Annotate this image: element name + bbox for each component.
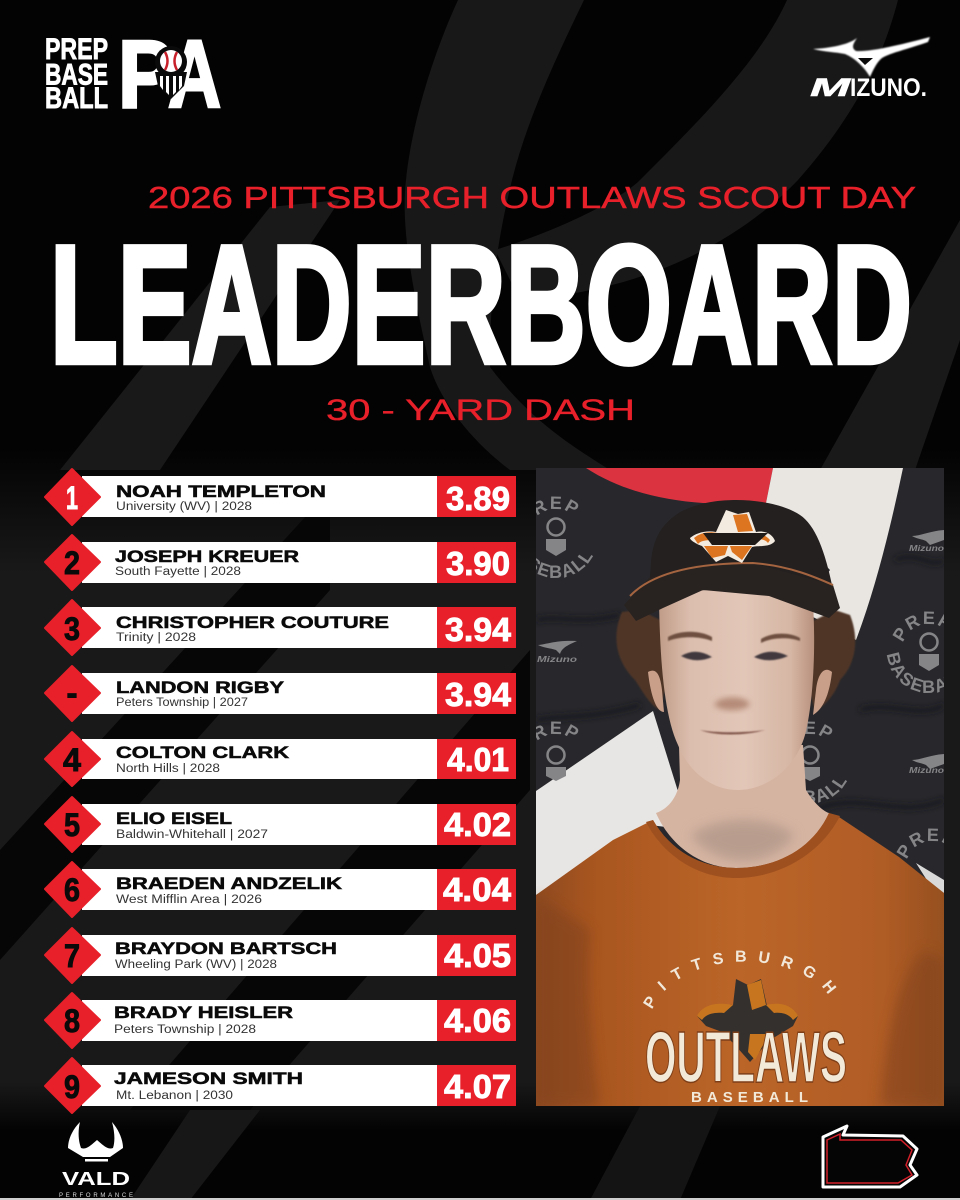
logo: VALD Performance: PERFORMANCE: [59, 1193, 133, 1199]
backdrop logos: PREP: [536, 496, 578, 515]
icon: baseball shield: [155, 46, 187, 99]
row 8: BRAYDON BARTSCH: [115, 939, 337, 958]
player: shirt: [536, 813, 944, 1106]
row 1: University (WV) | 2028: [116, 501, 252, 513]
row 3: CHRISTOPHER COUTURE: [116, 613, 389, 632]
row 1: 1: [66, 480, 78, 516]
backdrop logos: BASEBALL: [536, 554, 593, 578]
row 7: 6: [64, 872, 80, 908]
row 6: 4.02: [444, 806, 511, 843]
player: face: [659, 589, 814, 790]
logo: Prep Baseball PA: BALL: [45, 82, 108, 115]
row 6: Baldwin-Whitehall | 2027: [116, 829, 268, 841]
row 4: Peters Township | 2027: [116, 697, 248, 709]
backdrop logos: [536, 496, 944, 858]
row 5: [45, 732, 516, 786]
row 10: 9: [64, 1069, 80, 1105]
row 9: 4.06: [444, 1002, 511, 1039]
heading: event name: 2026 PITTSBURGH OUTLAWS SCOUT DAY: [148, 181, 916, 215]
player: neck: [656, 745, 829, 868]
row 4: LANDON RIGBY: [116, 678, 285, 697]
backdrop logos: BASEBALL: [806, 780, 847, 803]
shirt logo: BASEBALL: [691, 1089, 808, 1106]
row 9: [45, 993, 516, 1048]
row 2: [45, 535, 516, 590]
row 7: BRAEDEN ANDZELIK: [116, 874, 343, 893]
player: cap: [624, 500, 840, 621]
logo: Prep Baseball PA: A: [168, 21, 221, 128]
shirt logo: PITTSBURGH: [643, 950, 836, 1009]
row 6: ELIO EISEL: [116, 809, 232, 828]
row 8: Wheeling Park (WV) | 2028: [115, 959, 277, 971]
logo: VALD Performance: [59, 1122, 133, 1199]
row 10: 4.07: [444, 1068, 511, 1105]
row 2: 3.90: [446, 545, 510, 582]
row 1: [45, 469, 516, 525]
row 5: COLTON CLARK: [116, 743, 290, 762]
row 9: 8: [64, 1003, 80, 1039]
backdrop logos: PREP: [536, 722, 578, 740]
row 1: 3.89: [446, 480, 510, 517]
row 8: 7: [64, 938, 80, 974]
row 9: BRADY HEISLER: [114, 1003, 293, 1022]
row 3: 3.94: [445, 611, 512, 648]
backdrop logos: PREP: [805, 722, 832, 736]
player: ears: [648, 670, 832, 715]
logo: Prep Baseball PA: P: [118, 21, 174, 128]
logo: Prep Baseball PA: PREP: [45, 33, 108, 66]
row 2: 2: [64, 545, 80, 581]
row 7: [45, 862, 516, 917]
player: hair: [616, 610, 855, 712]
logo: Prep Baseball PA: [45, 21, 221, 128]
leaderboard rows: [45, 469, 516, 1113]
row 9: Peters Township | 2028: [114, 1024, 256, 1036]
row 10: JAMESON SMITH: [114, 1069, 303, 1088]
icon: viking helmet: [68, 1122, 123, 1157]
backdrop logos: Mizuno: [909, 766, 944, 775]
row 7: West Mifflin Area | 2026: [116, 894, 262, 906]
row 10: Mt. Lebanon | 2030: [116, 1090, 233, 1102]
logo: Prep Baseball PA: BASE: [45, 58, 108, 92]
logo: Mizuno: M: [810, 74, 852, 102]
row 1: NOAH TEMPLETON: [116, 482, 326, 501]
row 5: 4: [63, 742, 81, 778]
backdrop logos: PREP: [892, 612, 944, 642]
row 10: [45, 1058, 516, 1113]
row 6: [45, 797, 516, 852]
backdrop logos: PREP: [896, 828, 944, 858]
row 3: 3: [64, 611, 80, 647]
row 3: Trinity | 2028: [116, 632, 196, 644]
row 5: North Hills | 2028: [116, 763, 220, 775]
row 4: 3.94: [445, 676, 512, 713]
row 8: [45, 928, 516, 983]
row 5: 4.01: [447, 741, 509, 778]
backdrop logos: Mizuno: [909, 544, 944, 553]
row 6: 5: [64, 807, 80, 843]
row 2: JOSEPH KREUER: [115, 547, 299, 566]
row 4: [45, 666, 516, 721]
photo backdrop: [536, 468, 944, 895]
logo: VALD Performance: VALD: [62, 1168, 130, 1189]
panel: player photo: [536, 468, 944, 1106]
row 8: 4.05: [444, 937, 511, 974]
row 7: 4.04: [443, 871, 512, 908]
subheading: event type: 30 - YARD DASH: [326, 394, 635, 427]
shirt logo: [643, 950, 846, 1102]
logo: Mizuno: IZUNO.: [850, 74, 927, 102]
backdrop logos: Mizuno: [537, 655, 577, 664]
row 2: South Fayette | 2028: [115, 566, 241, 578]
icon: Pennsylvania outline: [823, 1126, 917, 1187]
row 4: -: [66, 675, 78, 711]
logo: Mizuno: [810, 37, 930, 102]
cap logo: [690, 510, 775, 563]
row 3: [45, 600, 516, 655]
